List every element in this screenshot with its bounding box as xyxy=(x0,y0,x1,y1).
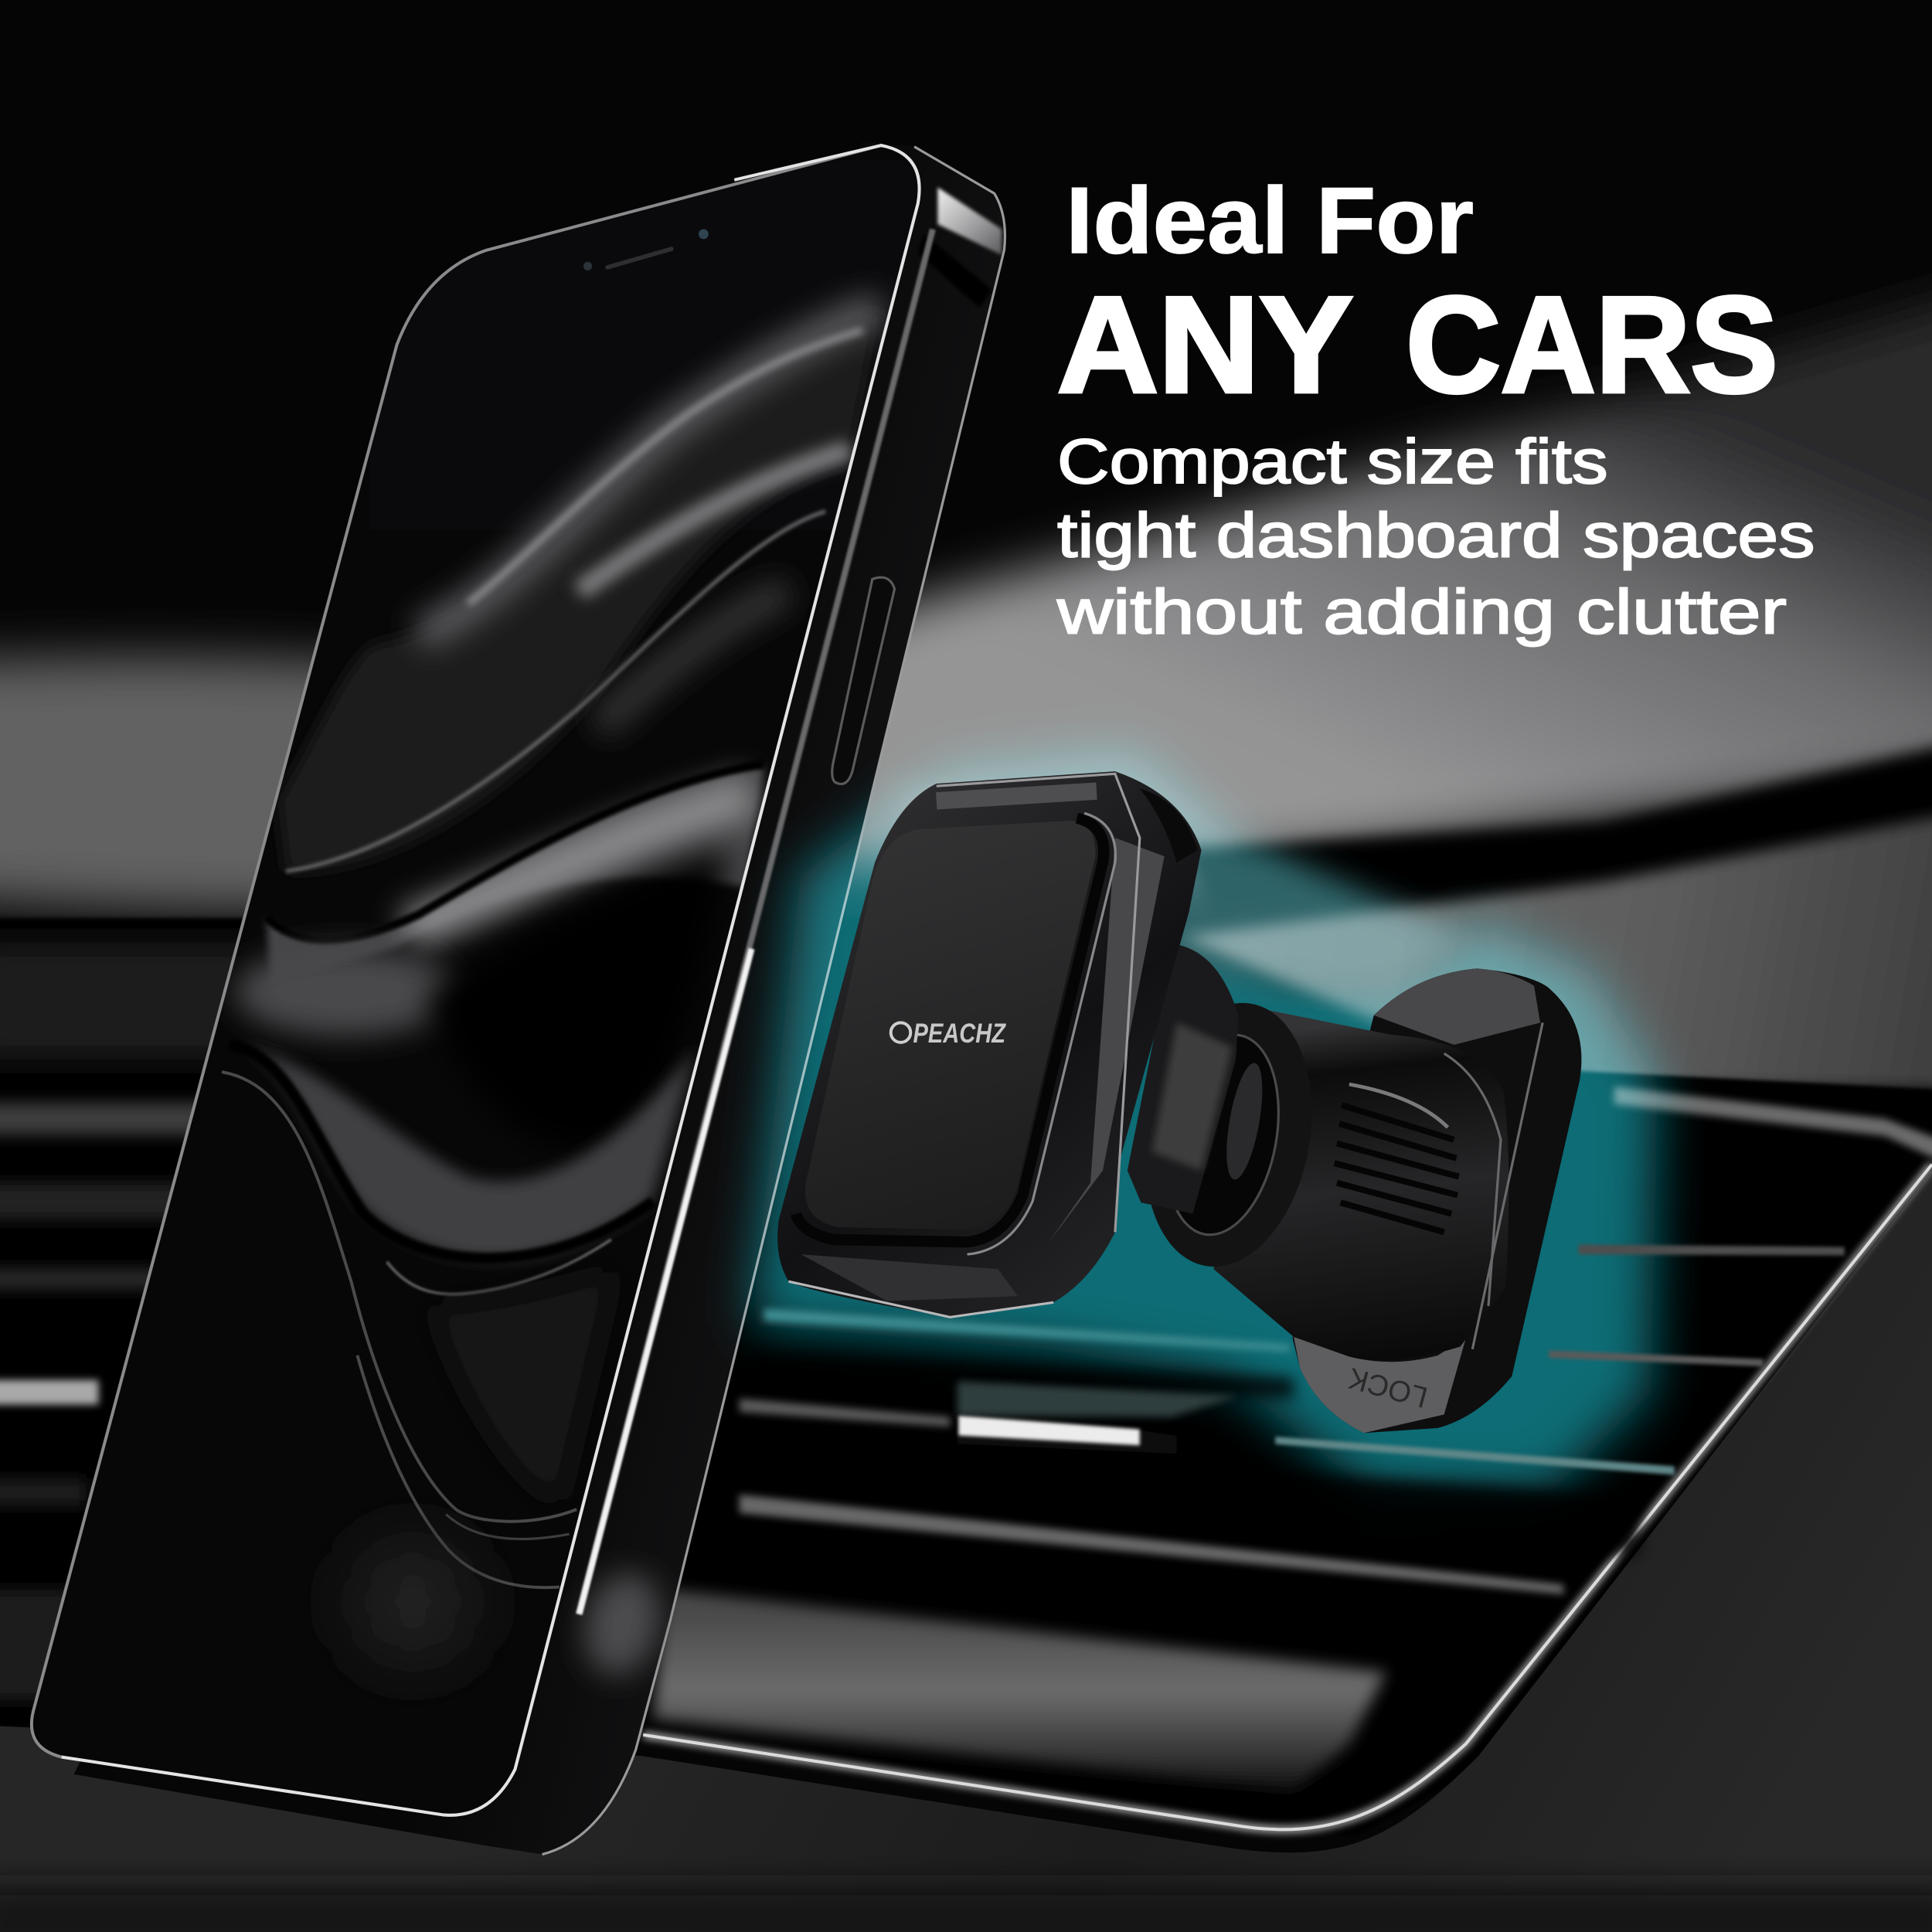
dark lens xyxy=(415,838,739,1035)
lower crescent xyxy=(226,1041,696,1259)
joint ring xyxy=(1125,990,1332,1280)
phone screen xyxy=(32,145,933,1815)
screen bezel highlight xyxy=(32,145,920,1815)
heading: ANY CARS: CARS xyxy=(1406,268,1778,421)
lower dashboard surface xyxy=(0,1140,1932,1932)
sticker lower bump xyxy=(1294,1337,1466,1433)
earpiece and sensors xyxy=(607,249,672,267)
mirrored lock lettering on sticker: LOCK xyxy=(1345,1361,1431,1414)
neck xyxy=(1128,945,1238,1213)
thin lower wave lines xyxy=(222,1072,577,1522)
phone body side xyxy=(74,141,1005,1855)
brand logo: PEACHZ xyxy=(913,1019,1006,1049)
left vent slats xyxy=(0,943,369,1060)
side lower glare xyxy=(573,1564,672,1683)
plate edge facet xyxy=(1047,838,1165,1244)
vent opening xyxy=(0,918,1932,1836)
sticker base plate xyxy=(1293,968,1581,1433)
shadow band xyxy=(1183,721,1932,914)
vent slats over glow xyxy=(740,1244,1845,1594)
magnet plate xyxy=(777,771,1202,1317)
rim second highlight xyxy=(579,230,933,1614)
volume button xyxy=(832,577,895,784)
brand logo xyxy=(891,1019,1006,1049)
description text: tight dashboard spaces xyxy=(1057,501,1815,571)
vent chrome tab xyxy=(957,1381,1238,1417)
vent chrome edge xyxy=(643,1165,1932,1829)
right vent rim xyxy=(1614,1087,1932,1168)
lower vent band xyxy=(653,1590,1386,1791)
wallpaper waves xyxy=(222,160,924,1663)
description text xyxy=(1056,427,1815,648)
lower textured dashboard xyxy=(1183,794,1932,1090)
heading: ANY CARS xyxy=(1057,268,1778,421)
heading: ANY CARS: ANY xyxy=(1057,268,1353,421)
side top highlight xyxy=(937,187,1002,255)
cone body xyxy=(1213,1004,1509,1360)
cone ribs xyxy=(1335,1105,1459,1232)
upper dashboard xyxy=(641,271,1932,862)
magnet pad xyxy=(805,821,1095,1230)
heading: Ideal For: Ideal For xyxy=(1066,168,1474,273)
description text: without adding clutter xyxy=(1056,577,1787,648)
teal glow behind mount xyxy=(752,752,1657,1491)
middle band xyxy=(266,767,764,986)
description text: Compact size fits xyxy=(1057,427,1608,497)
magnetic mount xyxy=(777,771,1581,1433)
